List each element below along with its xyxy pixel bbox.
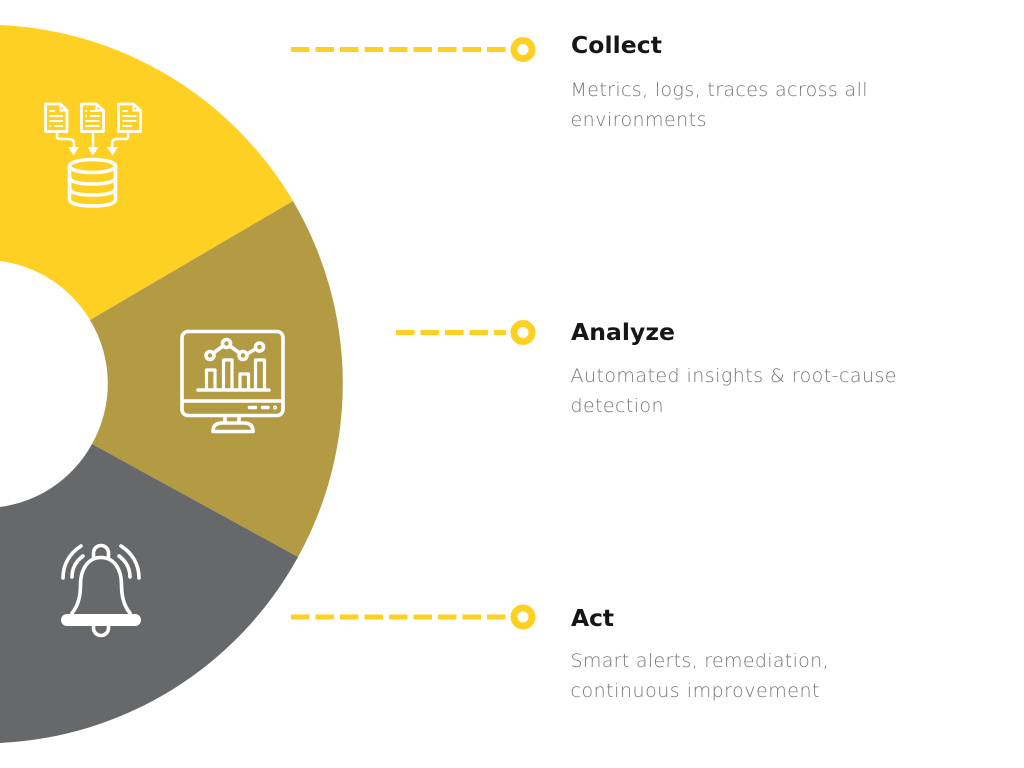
heading: act: Act [571, 604, 614, 632]
heading: analyze: Analyze [571, 318, 675, 346]
description: analyze: detection [570, 395, 664, 417]
text block: analyze [570, 318, 896, 417]
description: collect: Metrics, logs, traces across all [570, 79, 868, 101]
connector: analyze [396, 324, 532, 342]
description: act [570, 650, 828, 702]
connector: act [291, 608, 532, 626]
description: analyze [570, 365, 896, 417]
text block: collect [570, 31, 868, 131]
icon: ringing bell [63, 546, 139, 636]
icon: documents flowing into database [46, 104, 140, 206]
description: act: Smart alerts, remediation, [570, 650, 828, 672]
description: collect [570, 79, 868, 131]
icon: monitor with charts [182, 332, 283, 432]
text block: act [570, 604, 828, 702]
description: act: continuous improvement [570, 680, 820, 702]
heading: collect: Collect [571, 31, 662, 59]
connector: collect [291, 40, 532, 58]
donut segment: collect [0, 25, 293, 320]
panel: donut chart [0, 25, 343, 743]
donut segment: act [0, 444, 298, 743]
donut segment: analyze [90, 201, 343, 557]
description: analyze: Automated insights & root-cause [570, 365, 896, 387]
description: collect: environments [570, 109, 706, 131]
